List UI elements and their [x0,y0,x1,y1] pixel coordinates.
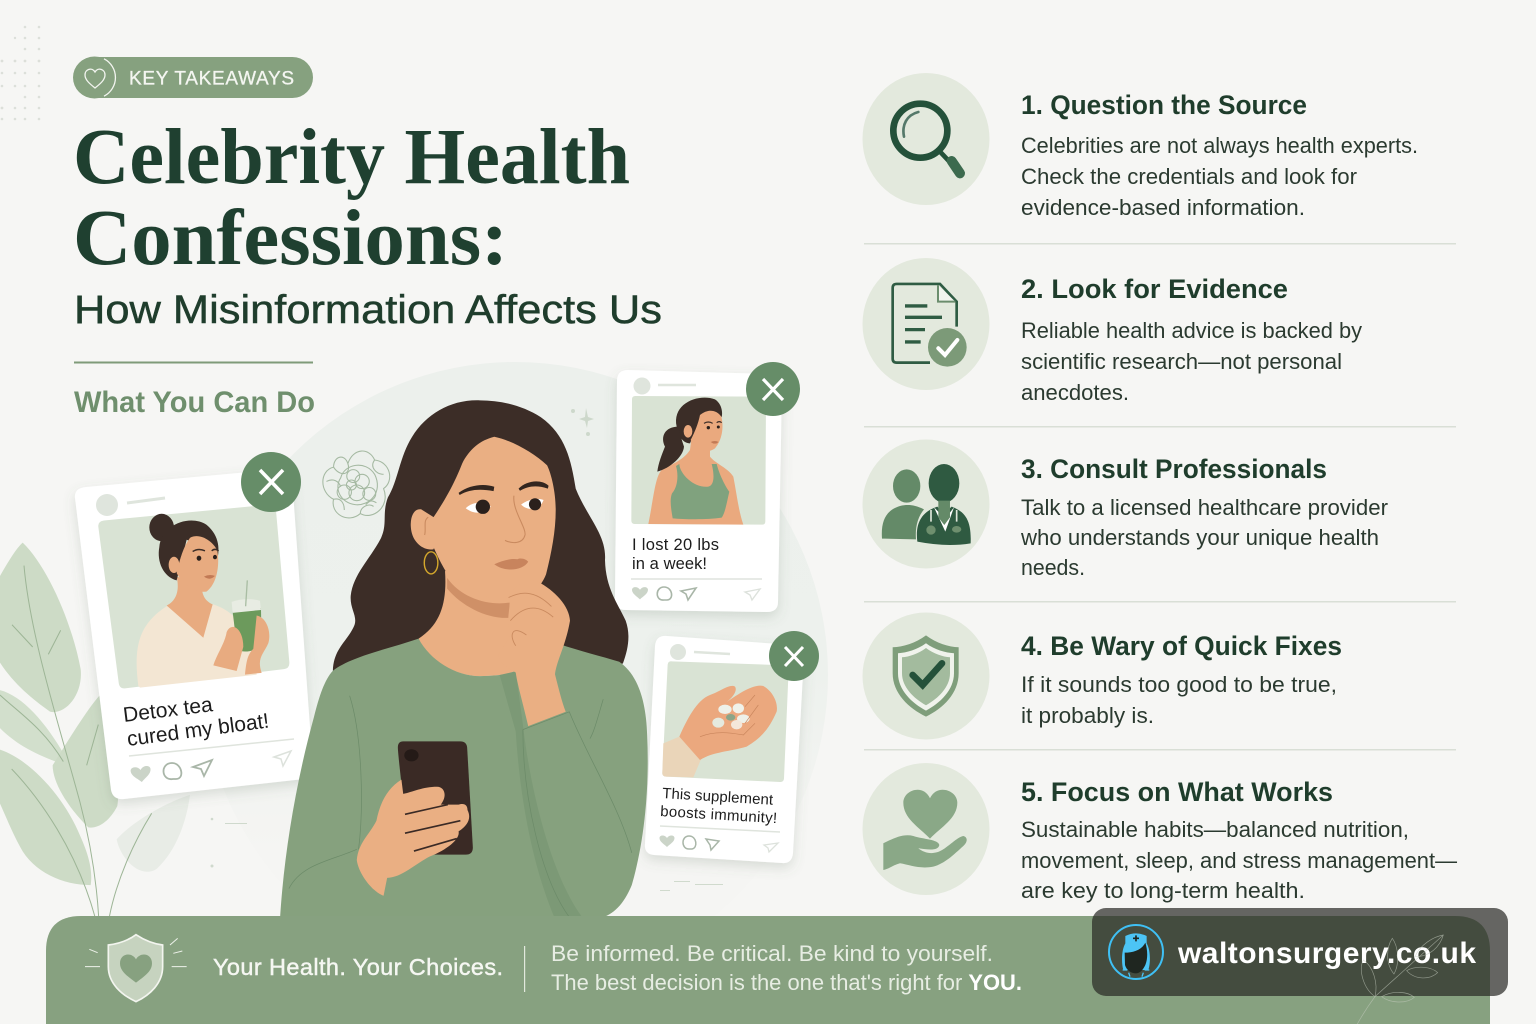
item 4: quick fixes [862,612,1342,740]
item 3: consult professionals: needs. [1021,555,1085,580]
card caption: Detox tea [122,693,214,727]
card caption: boosts immunity! [660,803,778,827]
item 1: question the source: 1. Question the Source [1021,90,1307,120]
card caption: This supplement [662,785,774,809]
card caption: in a week! [632,555,707,573]
badge: key takeaways: KEY TAKEAWAYS [129,68,294,90]
title [73,114,630,282]
card caption [660,785,778,827]
card avatar [634,378,696,394]
decorative sprig [1357,935,1443,1024]
item 5: what works: 5. Focus on What Works [1021,777,1333,807]
item 1: question the source: Check the credentials and look for [1021,164,1357,189]
sparkle marks [210,408,723,891]
icon: nurse logo [1109,925,1163,979]
item 3: consult professionals: who understands your unique health [1020,525,1379,550]
item 5: what works: Sustainable habits—balanced nutrition, [1021,817,1409,842]
decorative plant [0,543,190,917]
card image: pills in hand [662,661,789,782]
card avatar [96,494,165,516]
item 4: quick fixes: If it sounds too good to be true, [1021,672,1337,697]
subtitle: How Misinformation Affects Us [74,288,662,332]
post card: lost 20 lbs [615,362,800,612]
card caption: I lost 20 lbs [632,536,719,554]
reject badge [746,362,800,416]
card reactions [660,835,778,852]
item 1: question the source: evidence-based information. [1021,195,1305,220]
footer banner [46,916,1490,1024]
icon: patient and doctor [862,440,990,568]
item 2: look for evidence: 2. Look for Evidence [1021,274,1288,304]
item 2: look for evidence: Reliable health advice is backed by [1021,318,1363,343]
badge: key takeaways [73,56,313,98]
section heading: What You Can Do [74,386,315,419]
footer banner: Your Health. Your Choices. [213,954,503,980]
item 3: consult professionals: Talk to a licensed healthcare provider [1021,495,1388,520]
card caption [122,693,270,751]
item 4: quick fixes: it probably is. [1021,703,1154,728]
doodle: tangled thoughts [323,451,390,518]
card avatar [670,644,730,660]
icon: shield with heart [85,935,187,1002]
title: Confessions: [73,195,508,282]
watermark: website [1092,908,1508,1024]
item 1: question the source [862,73,1418,220]
post card: supplement [645,631,819,863]
background circle behind woman [202,362,828,988]
card caption: cured my bloat! [126,709,270,751]
item 2: look for evidence [862,258,1363,405]
item 5: what works: movement, sleep, and stress management— [1021,848,1457,873]
reject badge [241,452,301,512]
icon: magnifying glass [862,73,990,205]
card image: woman with green drink [98,505,289,688]
item 3: consult professionals [862,440,1388,580]
card image: woman in sports top [631,396,766,525]
reject badge [769,631,819,681]
item 5: what works [862,763,1457,903]
icon: heart in hand [862,763,990,895]
illustration: thoughtful woman with phone [280,400,648,919]
card reactions [130,751,291,783]
item 2: look for evidence: scientific research—not personal [1021,349,1342,374]
item 1: question the source: Celebrities are not always health experts. [1021,133,1418,158]
footer banner: The best decision is the one that's right for YOU. [551,970,1022,995]
item 4: quick fixes: 4. Be Wary of Quick Fixes [1021,631,1342,661]
card caption [632,536,719,573]
item 3: consult professionals: 3. Consult Professionals [1021,454,1327,484]
item 5: what works: are key to long-term health. [1021,878,1305,903]
icon: shield with check [862,612,990,740]
title: Celebrity Health [73,114,630,201]
footer banner: Be informed. Be critical. Be kind to yourself. [551,941,993,966]
post card: detox tea [75,452,313,799]
item 2: look for evidence: anecdotes. [1021,380,1129,405]
watermark: website: waltonsurgery.co.uk [1177,937,1476,970]
card reactions [632,587,760,600]
icon: document with check [862,258,990,390]
